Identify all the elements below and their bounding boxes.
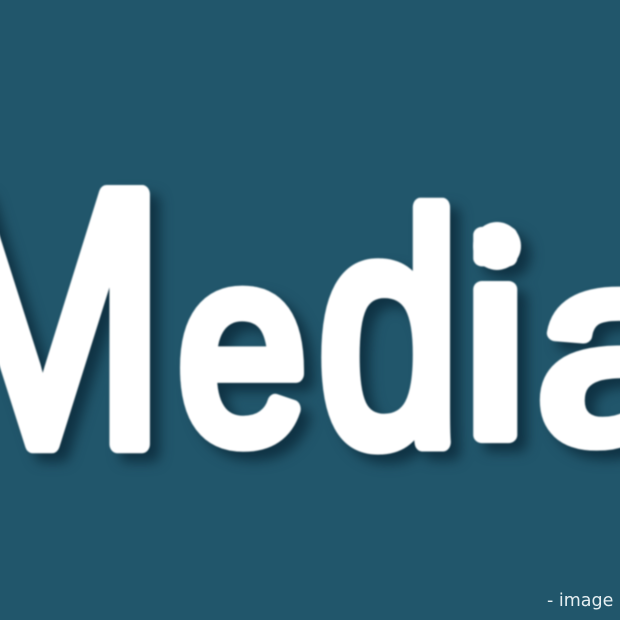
title: Media (0, 116, 620, 521)
letter i: i (462, 186, 529, 494)
letter d: d (318, 149, 460, 511)
letter e: e (178, 197, 306, 498)
letter i dot (473, 222, 521, 270)
caption: - image (547, 591, 613, 611)
